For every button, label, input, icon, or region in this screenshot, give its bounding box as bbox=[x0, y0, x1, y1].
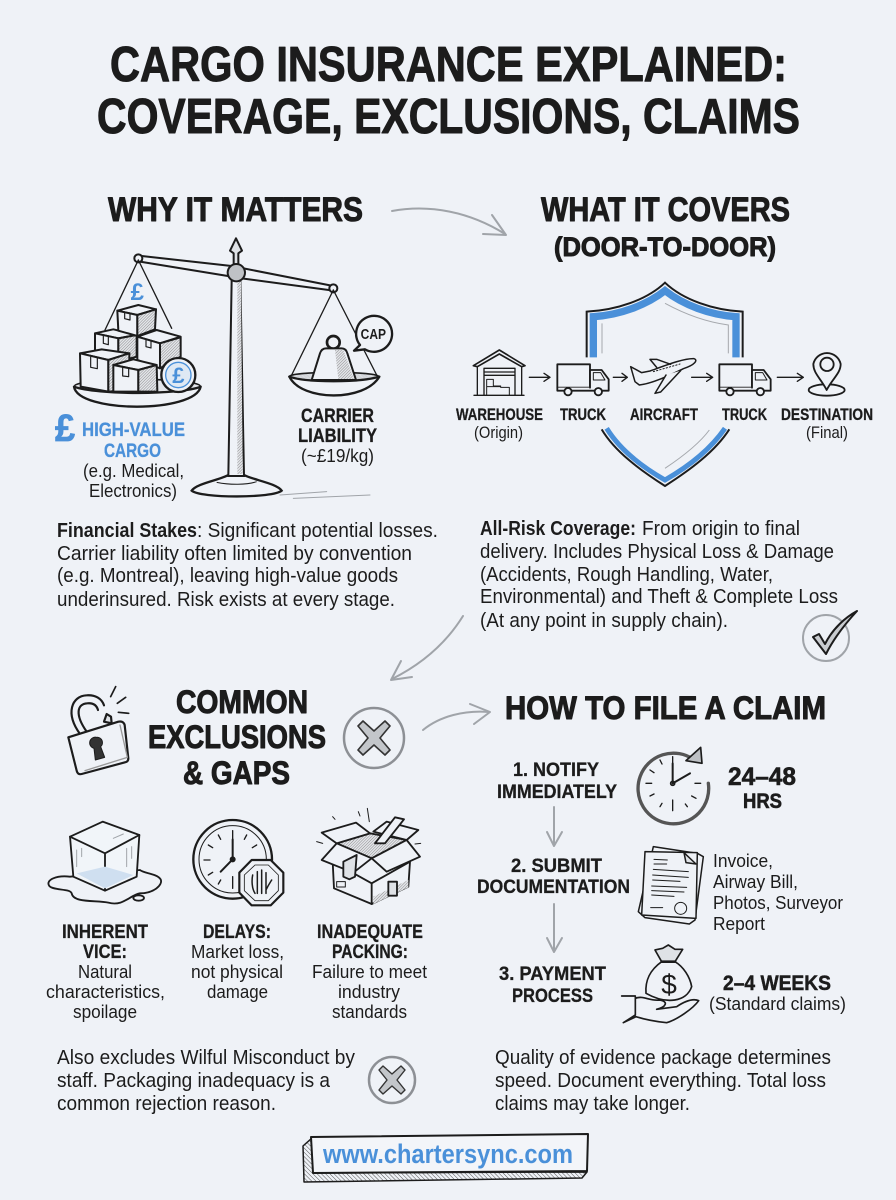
value: 24-48 hrs bbox=[728, 763, 796, 813]
icon: clock with stop hand bbox=[193, 820, 283, 905]
label: carrier liability: LIABILITY bbox=[298, 426, 377, 447]
icon: broken padlock bbox=[68, 687, 129, 774]
text: all-risk coverage: (At any point in supply chain). bbox=[480, 610, 728, 632]
arrow bbox=[529, 373, 550, 381]
heading: common exclusions and gaps bbox=[148, 684, 326, 791]
exclusion: inherent vice: INHERENT bbox=[62, 922, 148, 943]
heading: common exclusions and gaps: & GAPS bbox=[183, 755, 290, 791]
destination pin icon bbox=[809, 353, 845, 396]
claim steps labels bbox=[477, 760, 630, 1007]
claim steps labels: IMMEDIATELY bbox=[497, 782, 617, 803]
exclusion: inadequate packing: industry bbox=[338, 981, 401, 1002]
route labels bbox=[456, 405, 873, 442]
label: carrier liability: CARRIER bbox=[301, 406, 374, 427]
value: payment timing bbox=[709, 972, 846, 1014]
text: documents list: Report bbox=[713, 913, 765, 934]
right pan with weight and cap bubble: CAP bbox=[361, 327, 386, 343]
exclusion: inherent vice: VICE: bbox=[83, 942, 127, 963]
icon: money bag in hand: $ bbox=[661, 969, 677, 1000]
scale beam bbox=[134, 254, 337, 292]
text: financial stakes: (e.g. Montreal), leaving high-value goods bbox=[57, 565, 398, 587]
text: all-risk coverage bbox=[480, 518, 838, 632]
text: financial stakes: Carrier liability often limited by convention bbox=[57, 543, 412, 565]
door-to-door illustration bbox=[473, 283, 845, 486]
exclusion: inherent vice bbox=[46, 922, 165, 1022]
truck icon bbox=[557, 364, 609, 395]
heading: what it covers bbox=[541, 191, 790, 262]
text: quality of evidence bbox=[495, 1047, 831, 1115]
heading: why it matters: WHY IT MATTERS bbox=[108, 191, 363, 229]
text: also excludes: Also excludes Wilful Misconduct by bbox=[57, 1047, 355, 1069]
heading: how to file a claim: HOW TO FILE A CLAIM bbox=[505, 690, 826, 726]
heading: common exclusions and gaps: EXCLUSIONS bbox=[148, 719, 326, 755]
label: high-value cargo: (e.g. Medical, bbox=[83, 460, 184, 481]
text: documents list: Airway Bill, bbox=[713, 871, 798, 892]
text: documents list bbox=[713, 850, 843, 934]
icon: clock with arrow bbox=[638, 747, 709, 824]
text: quality of evidence: Quality of evidence package determines bbox=[495, 1047, 831, 1069]
exclusion: inadequate packing bbox=[312, 922, 427, 1022]
label: carrier liability bbox=[298, 406, 377, 466]
exclusion: delays: damage bbox=[207, 981, 268, 1002]
icon: documents bbox=[638, 847, 703, 924]
exclusion: delays: DELAYS: bbox=[203, 922, 271, 943]
truck icon bbox=[719, 364, 771, 395]
heading: what it covers: (DOOR-TO-DOOR) bbox=[554, 232, 776, 262]
arrow: exclusions to claim bbox=[423, 704, 490, 730]
aircraft icon bbox=[631, 359, 696, 393]
label: high-value cargo: CARGO bbox=[104, 441, 161, 462]
exclusion: inadequate packing: standards bbox=[332, 1001, 407, 1022]
route labels: WAREHOUSE bbox=[456, 405, 543, 424]
title: CARGO INSURANCE EXPLAINED: bbox=[110, 38, 787, 92]
shield bbox=[587, 283, 743, 486]
text: all-risk coverage: delivery. Includes Physical Loss & Damage bbox=[480, 541, 834, 563]
icon: small x circle bbox=[369, 1057, 415, 1103]
label: high-value cargo bbox=[55, 408, 185, 501]
text: quality of evidence: speed. Document everything. Total loss bbox=[495, 1070, 826, 1092]
title bbox=[97, 38, 800, 144]
value: payment timing: 2–4 WEEKS bbox=[723, 972, 831, 995]
exclusion: inherent vice: Natural bbox=[78, 961, 132, 982]
balance scale illustration bbox=[74, 238, 392, 498]
text: financial stakes: Financial Stakes bbox=[57, 520, 197, 542]
left pan with cargo boxes: £ bbox=[172, 363, 184, 388]
label: high-value cargo: Electronics) bbox=[89, 480, 177, 501]
exclusion: delays: not physical bbox=[191, 961, 283, 982]
label: carrier liability: (~£19/kg) bbox=[301, 445, 374, 466]
exclusion: inherent vice: spoilage bbox=[73, 1001, 137, 1022]
route labels: TRUCK bbox=[560, 405, 607, 424]
exclusion: delays: Market loss, bbox=[191, 941, 284, 962]
text: financial stakes bbox=[57, 520, 438, 611]
route labels: DESTINATION bbox=[781, 405, 873, 424]
arrow bbox=[692, 373, 713, 381]
step arrows bbox=[547, 807, 562, 952]
warehouse icon bbox=[473, 350, 525, 395]
icon: open damaged box bbox=[317, 808, 421, 904]
claim steps labels: DOCUMENTATION bbox=[477, 877, 630, 898]
icon: melting ice cube bbox=[48, 822, 161, 903]
exclusion: inherent vice: characteristics, bbox=[46, 981, 165, 1002]
route labels: TRUCK bbox=[722, 405, 768, 424]
right pan with weight and cap bubble bbox=[289, 290, 392, 395]
claim steps labels: 3. PAYMENT bbox=[499, 964, 606, 985]
exclusion: inadequate packing: PACKING: bbox=[332, 942, 408, 963]
text: all-risk coverage: (Accidents, Rough Handling, Water, bbox=[480, 564, 773, 586]
text: also excludes: staff. Packaging inadequacy is a bbox=[57, 1070, 331, 1092]
left pan with cargo boxes: £ bbox=[131, 279, 145, 306]
arrow: covers to exclusions bbox=[391, 616, 463, 680]
label: high-value cargo: HIGH-VALUE bbox=[82, 420, 185, 441]
heading: what it covers: WHAT IT COVERS bbox=[541, 191, 790, 229]
arrow: why to covers bbox=[392, 209, 506, 235]
scale post and base bbox=[192, 238, 370, 498]
footer url banner bbox=[303, 1134, 588, 1182]
icon: money bag in hand bbox=[622, 945, 699, 1023]
heading: common exclusions and gaps: COMMON bbox=[176, 684, 308, 720]
text: financial stakes: underinsured. Risk exists at every stage. bbox=[57, 589, 395, 611]
text: documents list: Photos, Surveyor bbox=[713, 892, 843, 913]
claim steps labels: PROCESS bbox=[512, 986, 593, 1007]
left pan with cargo boxes bbox=[74, 260, 201, 407]
value: payment timing: (Standard claims) bbox=[709, 993, 846, 1014]
text: documents list: Invoice, bbox=[713, 850, 773, 871]
route labels: (Origin) bbox=[474, 423, 523, 442]
value: 24-48 hrs: 24–48 bbox=[728, 763, 796, 791]
route labels: AIRCRAFT bbox=[630, 405, 698, 424]
value: 24-48 hrs: HRS bbox=[743, 790, 782, 813]
text: all-risk coverage: From origin to final bbox=[642, 518, 800, 540]
exclusion: inadequate packing: Failure to meet bbox=[312, 961, 427, 982]
claim steps labels: 1. NOTIFY bbox=[513, 760, 599, 781]
arrow bbox=[777, 373, 803, 381]
claim steps labels: 2. SUBMIT bbox=[511, 856, 602, 877]
text: all-risk coverage: All-Risk Coverage: bbox=[480, 518, 636, 540]
route labels: (Final) bbox=[806, 423, 848, 442]
text: financial stakes: : Significant potential losses. bbox=[197, 520, 438, 542]
label: high-value cargo: £ bbox=[55, 408, 75, 450]
exclusion: delays bbox=[191, 922, 284, 1002]
icon: x circle bbox=[344, 708, 404, 768]
icon: check mark bbox=[803, 611, 857, 661]
text: quality of evidence: claims may take longer. bbox=[495, 1093, 690, 1115]
exclusion: inadequate packing: INADEQUATE bbox=[317, 922, 423, 943]
text: also excludes bbox=[57, 1047, 355, 1115]
footer url banner: www.chartersync.com bbox=[322, 1139, 573, 1169]
text: also excludes: common rejection reason. bbox=[57, 1093, 276, 1115]
text: all-risk coverage: Environmental) and Theft & Complete Loss bbox=[480, 586, 838, 608]
arrow bbox=[613, 373, 627, 381]
